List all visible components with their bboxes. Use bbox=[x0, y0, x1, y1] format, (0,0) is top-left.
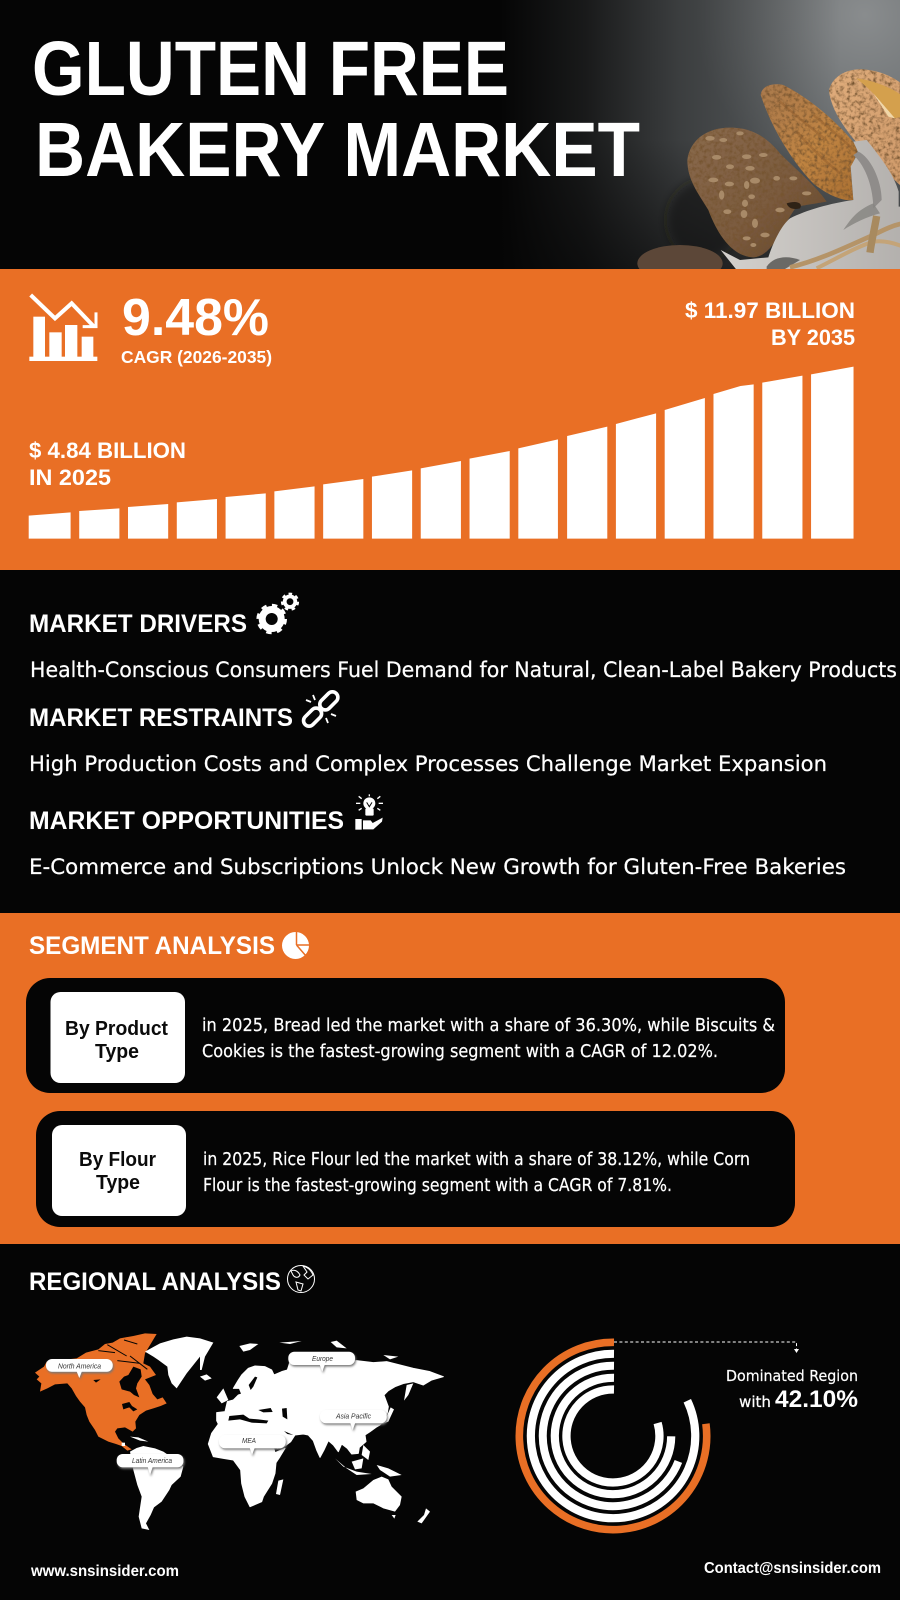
icon: globe bbox=[288, 1266, 314, 1292]
CAGR value: 9.48% bbox=[122, 289, 269, 347]
text: product type finding: in 2025, Bread led the market with a share of 36.30%, while Biscuits & bbox=[202, 1015, 775, 1036]
icon: lightbulb over hand bbox=[355, 794, 383, 830]
header photo: bread loaves on grey stone bbox=[532, 0, 900, 269]
label box: by product type: Type bbox=[95, 1041, 139, 1063]
text: dominated region: with bbox=[739, 1393, 771, 1411]
footer: website: www.snsinsider.com bbox=[30, 1563, 179, 1580]
label box: by product type bbox=[50, 992, 185, 1083]
panel: segment analysis bbox=[0, 913, 900, 1244]
label box: by product type: By Product bbox=[65, 1018, 168, 1040]
callout: North America bbox=[46, 1359, 113, 1378]
callout: MEA: MEA bbox=[242, 1436, 256, 1445]
label box: by flour type: By Flour bbox=[79, 1149, 156, 1171]
icon: broken chain link bbox=[301, 690, 340, 728]
text: product type finding: Cookies is the fastest-growing segment with a CAGR of 12.02%. bbox=[202, 1041, 718, 1062]
heading: regional analysis: REGIONAL ANALYSIS bbox=[29, 1268, 281, 1296]
text: restraint: High Production Costs and Complex Processes Challenge Market Expansion bbox=[29, 752, 827, 776]
2035 market value bbox=[685, 298, 855, 350]
world map bbox=[35, 1333, 443, 1530]
panel: market drivers, restraints and opportunities bbox=[29, 594, 897, 879]
text: product type finding bbox=[202, 1015, 775, 1062]
CAGR label: CAGR (2026-2035) bbox=[121, 347, 272, 367]
callout: Latin America: Latin America bbox=[132, 1456, 172, 1465]
callout: Asia Pacific bbox=[320, 1410, 387, 1430]
panel: market size and growth bbox=[0, 269, 900, 570]
text: flour type finding: Flour is the fastest-growing segment with a CAGR of 7.81%. bbox=[203, 1175, 672, 1196]
2035 market value: $ 11.97 BILLION bbox=[685, 298, 855, 323]
label box: by flour type bbox=[52, 1125, 186, 1216]
text: flour type finding: in 2025, Rice Flour led the market with a share of 38.12%, while Corn bbox=[203, 1149, 750, 1170]
icon: bar chart with trend arrow bbox=[29, 295, 97, 361]
card: by flour type bbox=[36, 1111, 795, 1227]
title: BAKERY MARKET bbox=[35, 107, 640, 193]
radial bar chart: regional shares bbox=[519, 1342, 707, 1530]
text: dominated region bbox=[726, 1367, 858, 1413]
card: by product type bbox=[26, 978, 785, 1093]
text: flour type finding bbox=[203, 1149, 750, 1196]
icon: pie chart bbox=[282, 931, 310, 959]
callout: Latin America bbox=[117, 1454, 183, 1475]
heading: market opportunities: MARKET OPPORTUNITIES bbox=[29, 807, 344, 835]
callout: Europe bbox=[288, 1352, 355, 1372]
title bbox=[32, 26, 640, 193]
2035 market value: BY 2035 bbox=[771, 325, 855, 350]
arrow: dashed leader to dominated region bbox=[614, 1342, 799, 1353]
South America, Greenland and Caribbean bbox=[122, 1337, 213, 1530]
heading: segment analysis: SEGMENT ANALYSIS bbox=[29, 932, 275, 960]
callout: MEA bbox=[219, 1435, 286, 1455]
label box: by flour type: Type bbox=[96, 1172, 140, 1194]
bar chart: growth 2025 to 2035 bbox=[29, 367, 854, 539]
callout: Europe: Europe bbox=[312, 1354, 333, 1363]
heading: market drivers: MARKET DRIVERS bbox=[29, 610, 247, 638]
heading: market restraints: MARKET RESTRAINTS bbox=[29, 704, 293, 732]
2025 market value: IN 2025 bbox=[29, 465, 111, 490]
title: GLUTEN FREE bbox=[32, 26, 509, 112]
text: dominated region: Dominated Region bbox=[726, 1367, 858, 1385]
footer: contact email: Contact@snsinsider.com bbox=[704, 1560, 881, 1577]
callout: Asia Pacific: Asia Pacific bbox=[335, 1412, 371, 1420]
text: driver: Health-Conscious Consumers Fuel Demand for Natural, Clean-Label Bakery Products bbox=[30, 658, 897, 682]
North America (highlighted) bbox=[35, 1333, 167, 1451]
text: opportunity: E-Commerce and Subscriptions Unlock New Growth for Gluten-Free Bakeries bbox=[29, 855, 846, 879]
2025 market value: $ 4.84 BILLION bbox=[29, 438, 186, 463]
callout: North America: North America bbox=[58, 1362, 101, 1370]
icon: gears bbox=[258, 594, 298, 632]
text: dominated region: 42.10% bbox=[775, 1386, 858, 1413]
2025 market value bbox=[29, 438, 186, 490]
Eurasia, Africa, Australia and islands bbox=[200, 1340, 443, 1523]
